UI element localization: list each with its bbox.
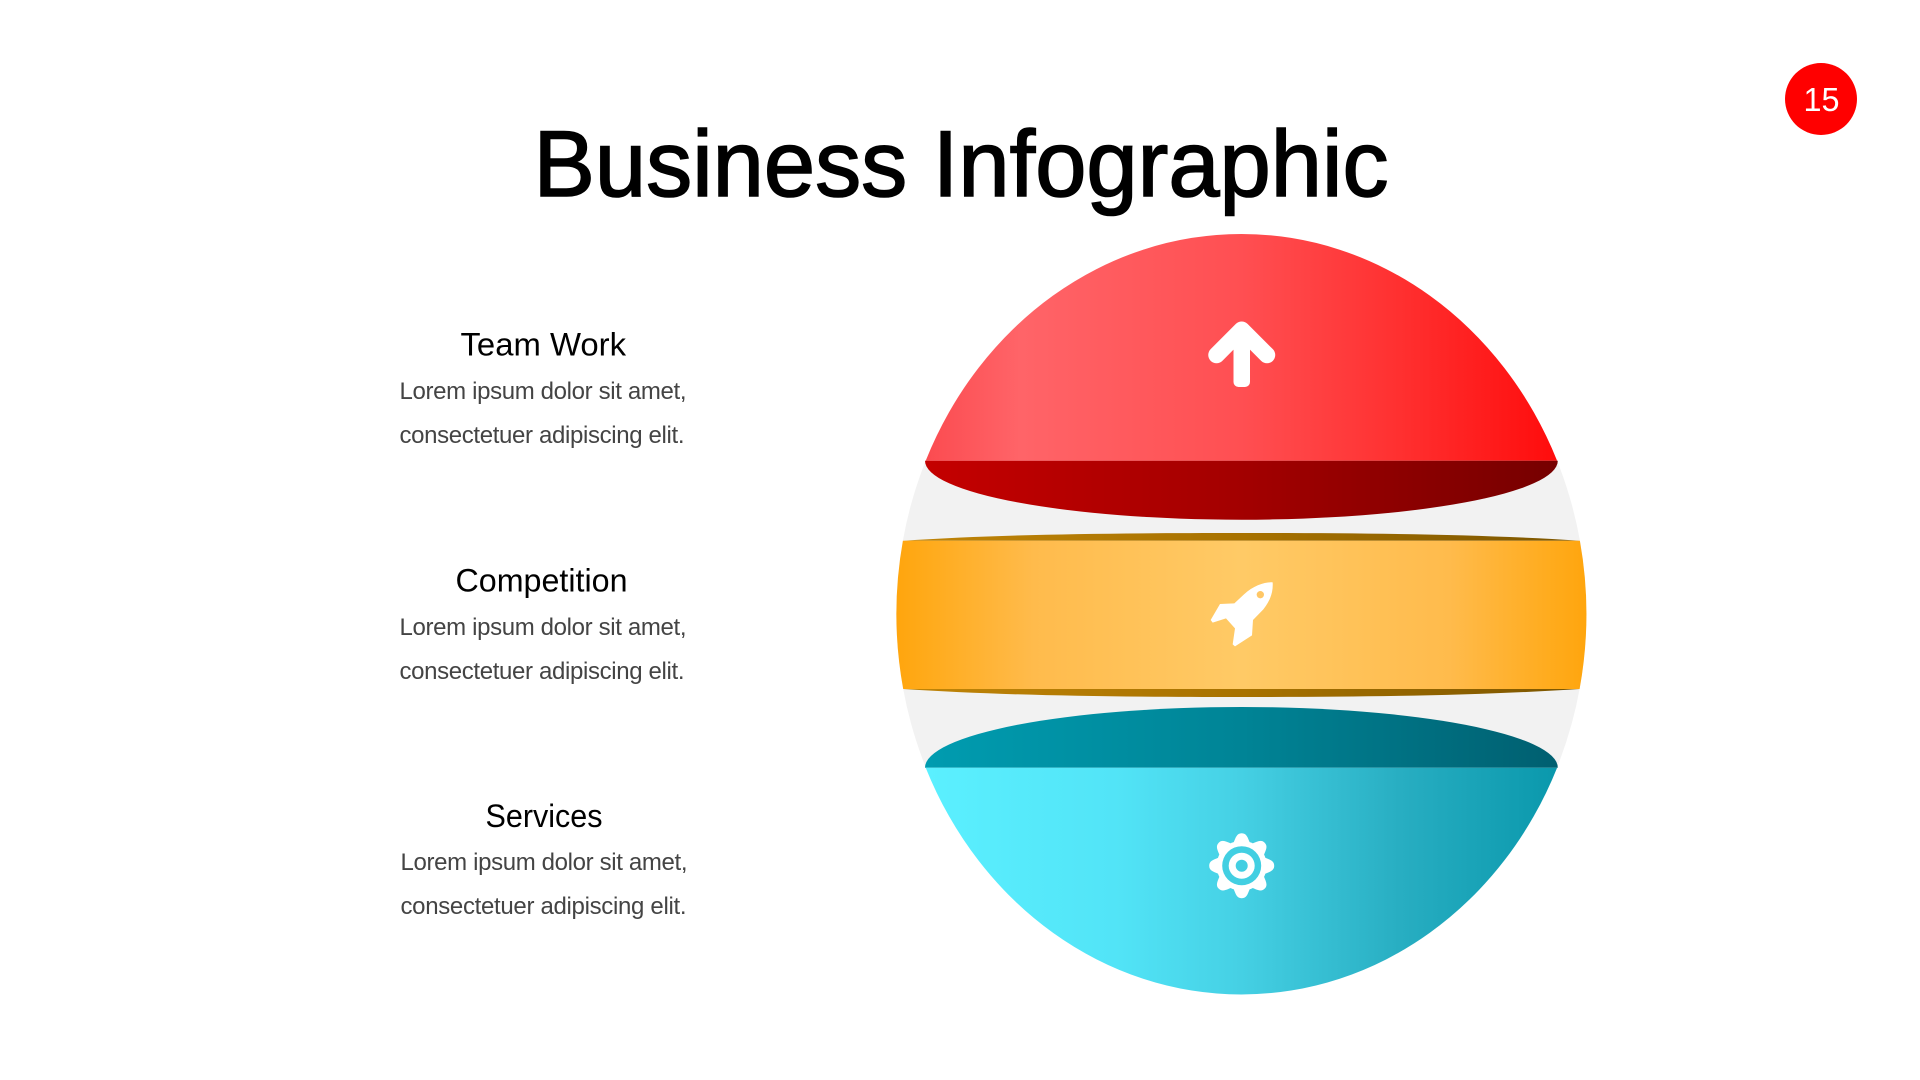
top slice: red dome (926, 234, 1557, 461)
text block: Services: Services (486, 798, 602, 834)
text block: Services: consectetuer adipiscing elit. (400, 893, 686, 920)
bottom slice: teal bowl (926, 768, 1557, 994)
icon: up arrow (1216, 330, 1267, 387)
sphere diagram (896, 234, 1586, 994)
text block: Competition: Lorem ipsum dolor sit amet, (400, 614, 686, 641)
text block: Competition: Competition (456, 562, 628, 598)
text block: Team Work: consectetuer adipiscing elit. (400, 422, 684, 449)
middle slice: orange bottom rim (903, 689, 1580, 697)
page number badge: 15 (1804, 81, 1840, 118)
text block: Services (400, 798, 688, 920)
page number badge (1785, 63, 1857, 135)
text block: Services: Lorem ipsum dolor sit amet, (400, 849, 688, 876)
grey sphere core (903, 462, 1580, 766)
text block: Team Work: Lorem ipsum dolor sit amet, (400, 378, 686, 405)
text block: Team Work: Team Work (460, 327, 627, 363)
icon: gear (1209, 833, 1274, 898)
bottom slice: dark teal top (925, 707, 1558, 768)
middle slice: orange band (896, 541, 1586, 689)
top slice: dark red underside (925, 461, 1558, 520)
text block: Competition (400, 562, 686, 685)
text block: Team Work (400, 327, 686, 449)
icon: rocket (1211, 582, 1273, 646)
title: Business Infographic (534, 111, 1388, 216)
text block: Competition: consectetuer adipiscing elit. (400, 658, 684, 685)
middle slice: orange top rim (903, 533, 1580, 541)
